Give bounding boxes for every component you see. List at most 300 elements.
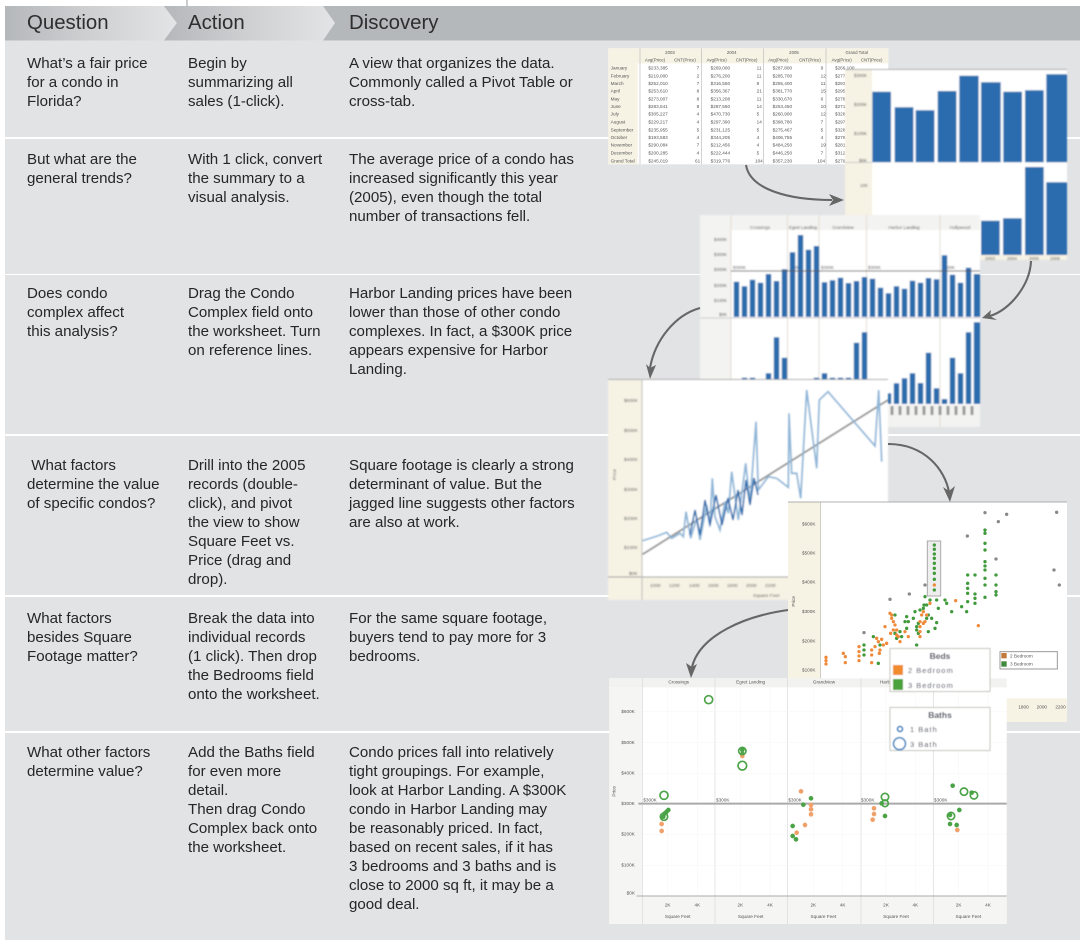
row 5 action: Break the data into	[188, 610, 315, 627]
chart: pivot table: $285,700	[773, 73, 792, 78]
row 5 action: (1 click). Then drop	[188, 648, 317, 665]
chart: square feet vs price line: $200K	[624, 516, 639, 522]
chart: pivot table: $279,000	[835, 135, 855, 140]
legend: baths: 3 Bath	[910, 740, 938, 749]
legend: beds: 2 Bedroom	[908, 666, 954, 675]
row 5 action: onto the worksheet.	[188, 686, 320, 703]
chart: baths scatter by complex: 4K	[694, 902, 701, 907]
chart: pivot table: $312,000	[835, 150, 855, 155]
chart: pivot table: 4	[821, 135, 824, 140]
chart: pivot table: 5	[757, 150, 760, 155]
row 2 action	[188, 151, 322, 206]
chart: pivot table: 11	[757, 73, 762, 78]
row 2 question: general trends?	[27, 170, 132, 187]
chart: pivot table: December	[611, 150, 633, 155]
row 5 action	[188, 610, 320, 703]
legend: baths	[890, 708, 990, 750]
row 6 discovery: Condo prices fall into relatively	[349, 744, 554, 761]
row 4 action: Square Feet vs.	[188, 533, 295, 550]
chart: pivot table: October	[611, 135, 628, 140]
chart: baths scatter by complex: 2K	[810, 902, 817, 907]
chart: pivot table: $278,000	[835, 96, 855, 101]
row 4 action: Price (drag and	[188, 552, 291, 569]
chart: pivot table: 104	[817, 158, 826, 163]
chart: pivot table: 12	[821, 112, 826, 117]
chart: pivot table: June	[611, 104, 621, 109]
chart: baths scatter by complex: Square Feet	[665, 914, 691, 919]
chart: bedrooms scatter: 2000	[1037, 704, 1047, 709]
chart: pivot table: $305,227	[648, 112, 668, 117]
chart: pivot table: $222,444	[711, 150, 730, 155]
chart: pivot table: Avg(Price)	[768, 57, 789, 62]
chart: pivot table: $287,800	[773, 66, 792, 71]
chart: pivot table: $470,730	[711, 112, 730, 117]
chart: bedrooms scatter	[788, 502, 1067, 722]
chart: pivot table: $252,010	[648, 81, 668, 86]
chart: pivot table: $229,217	[648, 120, 668, 125]
row 2 question: But what are the	[27, 151, 137, 168]
chart: pivot table: 4	[697, 150, 700, 155]
chart: condo complex bars: Grandview	[832, 225, 855, 230]
row 1 question: Florida?	[27, 93, 82, 110]
row 5 discovery	[349, 610, 547, 665]
row 2 discovery: The average price of a condo has	[349, 151, 574, 168]
row 5 action: individual records	[188, 629, 305, 646]
arrow: table to bars	[746, 165, 844, 206]
row 6 action: Add the Baths field	[188, 744, 315, 761]
chart: pivot table: November	[611, 143, 633, 148]
chart: square feet vs price line: 1000	[650, 583, 661, 589]
chart: pivot table: 5	[697, 127, 700, 132]
chart: pivot table: Avg(Price)	[707, 57, 727, 62]
row 6 action: Then drag Condo	[188, 801, 305, 818]
row 6 action: Complex back onto	[188, 820, 317, 837]
row 1 discovery: Commonly called a Pivot Table or	[349, 74, 573, 91]
chart: pivot table: $266,100	[835, 66, 855, 71]
chart: baths scatter by complex: 2K	[883, 902, 890, 907]
chart: baths scatter by complex: $300K	[788, 797, 803, 802]
chart: pivot table: 6	[821, 96, 824, 101]
chart: pivot table: 8	[697, 104, 700, 109]
chart: square feet vs price line: $500K	[624, 428, 639, 434]
chart: pivot table: $253,450	[773, 104, 792, 109]
row 4 action: the view to show	[188, 514, 300, 531]
chart: baths scatter by complex: Grandview	[813, 680, 836, 685]
row 3 question	[27, 285, 124, 340]
chart: baths scatter by complex: $100K	[621, 863, 636, 868]
chart: baths scatter by complex: 4K	[840, 902, 846, 907]
chart: baths scatter by complex: 2K	[956, 902, 962, 907]
chart: pivot table: $213,208	[711, 96, 730, 101]
chart: monthly bars: 100	[860, 183, 868, 188]
chart: monthly bars	[845, 69, 1067, 261]
chart: baths scatter by complex: $400K	[621, 771, 636, 776]
chart: pivot table: $255,400	[773, 81, 792, 86]
chart: baths scatter by complex	[609, 678, 1007, 924]
chart: baths scatter by complex: Square Feet	[738, 914, 764, 919]
row 2 discovery: number of transactions fell.	[349, 208, 530, 225]
row 4 question: of specific condos?	[27, 495, 155, 512]
chart: pivot table: $200,285	[648, 150, 668, 155]
row 4 discovery	[348, 457, 575, 531]
chart: condo complex bars: $300K	[942, 265, 955, 270]
chart: pivot table: $279,000	[835, 158, 855, 163]
row 6 action: for even more	[188, 763, 281, 780]
chart: baths scatter by complex: Price	[611, 786, 616, 797]
arrow: scatter to baths chart	[686, 610, 788, 678]
chart: condo complex bars: $300K	[790, 265, 803, 270]
row 1 discovery	[349, 55, 573, 110]
heading: Discovery: Discovery	[349, 12, 439, 34]
chart: bedrooms scatter: Price	[791, 596, 796, 607]
chart: bedrooms scatter: $600K	[802, 522, 816, 527]
row 6 discovery	[349, 744, 566, 913]
chart: condo complex bars: Harbor Landing	[888, 225, 920, 230]
chart: baths scatter by complex: $200K	[621, 832, 636, 837]
row 3 discovery: lower than those of other condo	[349, 304, 560, 321]
chart: pivot table: 5	[757, 127, 760, 132]
chart: pivot table: May	[611, 96, 620, 101]
chart: bedrooms scatter: 2 Bedroom	[1010, 654, 1033, 659]
row 2 action: visual analysis.	[188, 189, 290, 206]
chart: pivot table: 11	[757, 96, 762, 101]
row 3 action: the worksheet. Turn	[188, 323, 321, 340]
row 6 action: detail.	[188, 782, 228, 799]
chart: pivot table: $381,770	[773, 89, 792, 94]
chart: pivot table: $316,550	[711, 81, 730, 86]
chart: pivot table: 5	[757, 112, 760, 117]
legend: beds: 3 Bedroom	[908, 681, 954, 690]
row 6 question: determine value?	[27, 763, 143, 780]
row 6 discovery: be reasonably priced. In fact,	[349, 820, 543, 837]
chart: monthly bars: $300K	[854, 73, 867, 78]
chart: pivot table: $271,000	[835, 104, 855, 109]
legend: beds: Beds	[930, 651, 951, 661]
chart: baths scatter by complex: 2K	[665, 902, 671, 907]
chart: pivot table: March	[611, 81, 624, 86]
chart: pivot table: $297,390	[711, 120, 730, 125]
chart: pivot table: $233,385	[648, 66, 668, 71]
chart: pivot table: $484,250	[773, 143, 792, 148]
row 3 action: Complex field onto	[188, 304, 313, 321]
chart: pivot table: Avg(Price)	[645, 57, 666, 62]
chart: square feet vs price line: $400K	[624, 457, 639, 463]
chart: pivot table: February	[611, 73, 630, 78]
chart: condo complex bars: $300K	[733, 265, 746, 270]
row 1 question: What’s a fair price	[27, 55, 148, 72]
chart: baths scatter by complex: $300K	[716, 797, 730, 802]
row 4 action: click), and pivot	[188, 495, 292, 512]
chart: pivot table: $281,000	[835, 143, 855, 148]
row 2 question	[27, 151, 137, 187]
row 2 action: the summary to a	[188, 170, 305, 187]
chart: monthly bars: 2004	[1007, 256, 1018, 261]
legend: beds	[890, 648, 990, 692]
chart: bedrooms scatter: 1800	[1018, 704, 1029, 709]
row 1 action: summarizing all	[188, 74, 293, 91]
row 6 discovery: look at Harbor Landing. A $300K	[349, 782, 566, 799]
chart: pivot table: April	[611, 89, 620, 94]
chart: baths scatter by complex: $300K	[861, 797, 875, 802]
chart: baths scatter by complex: $0K	[627, 891, 636, 896]
chart: pivot table: Grand Total	[846, 50, 868, 55]
row 5 discovery: bedrooms.	[349, 648, 420, 665]
chart: square feet vs price line: $0K	[629, 571, 638, 577]
chart: baths scatter by complex: 4K	[767, 902, 774, 907]
chart: pivot table: $293,000	[835, 81, 855, 86]
chart: pivot table: $357,230	[773, 158, 792, 163]
chart: pivot table: $193,583	[648, 135, 668, 140]
chart: pivot table: 61	[695, 158, 701, 163]
chart: baths scatter by complex: Square Feet	[883, 914, 910, 919]
chart: pivot table: $295,000	[835, 89, 855, 94]
row 6 discovery: based on recent sales, if it has	[349, 839, 553, 856]
chart: pivot table: $235,955	[648, 127, 668, 132]
row 3 question: Does condo	[27, 285, 108, 302]
row 6 discovery: close to 2000 sq ft, it may be a	[349, 877, 554, 894]
chart: pivot table: $319,776	[711, 158, 730, 163]
chart: condo complex bars: $300K	[868, 265, 881, 270]
chart: baths scatter by complex: $600K	[621, 709, 636, 714]
chart: square feet vs price line: $600K	[624, 398, 639, 404]
row 3 action: Drag the Condo	[188, 285, 295, 302]
chart: pivot table: January	[611, 66, 628, 71]
chart: pivot table: Grand Total	[611, 158, 635, 163]
chart: pivot table: 7	[821, 150, 824, 155]
row 6 question	[27, 744, 150, 780]
chart: baths scatter by complex: 2K	[737, 902, 744, 907]
row 4 question: What factors	[31, 457, 116, 474]
chart: baths scatter by complex: Harbor Landing	[880, 680, 912, 685]
row 1 discovery: A view that organizes the data.	[349, 55, 555, 72]
chart: baths scatter by complex: $300K	[643, 797, 658, 802]
row 6 discovery: 3 bedrooms and 3 baths and is	[349, 858, 556, 875]
row 4 discovery: Square footage is clearly a strong	[349, 457, 574, 474]
chart: pivot table	[608, 48, 888, 164]
chart: square feet vs price line	[608, 379, 888, 600]
chart: pivot table: $277,000	[835, 73, 855, 78]
row 3 discovery: Landing.	[349, 361, 407, 378]
chart: pivot table: 7	[697, 143, 700, 148]
chart: pivot table: 104	[755, 158, 763, 163]
chart: pivot table: 14	[757, 120, 762, 125]
row 1 question: for a condo in	[27, 74, 118, 91]
row 6 discovery: good deal.	[349, 896, 420, 913]
row 6 discovery: tight groupings. For example,	[349, 763, 544, 780]
row 4 discovery: jagged line suggests other factors	[349, 495, 575, 512]
row 1 action: sales (1-click).	[188, 93, 284, 110]
chart: pivot table: $406,755	[773, 135, 792, 140]
chart: square feet vs price line: 1200	[669, 583, 680, 589]
chart: pivot table: Avg(Price)	[832, 57, 852, 62]
chart: baths scatter by complex: Crossings	[668, 680, 690, 685]
chart: pivot table: $290,084	[648, 143, 668, 148]
chart: condo complex bars	[700, 215, 980, 427]
row 4 question	[27, 457, 160, 512]
row 5 discovery: buyers tend to pay more for 3	[349, 629, 546, 646]
row 3 discovery: appears expensive for Harbor	[349, 342, 548, 359]
chart: condo complex bars: $300K	[714, 267, 727, 272]
legend: baths: 1 Bath	[910, 725, 938, 734]
chart: pivot table: 2	[697, 73, 700, 78]
chart: pivot table: $356,367	[711, 89, 730, 94]
row 4 action	[188, 457, 305, 588]
chart: pivot table: 4	[697, 112, 700, 117]
chart: pivot table: $212,456	[711, 143, 730, 148]
chart: pivot table: $245,019	[648, 158, 668, 163]
chart: condo complex bars: Crossings	[750, 225, 771, 230]
chart: baths scatter by complex: 4K	[985, 902, 992, 907]
chart: pivot table: $273,007	[648, 96, 668, 101]
row 2 discovery	[349, 151, 574, 225]
chart: monthly bars: 2005	[1029, 256, 1040, 261]
chart: pivot table: 2004	[727, 50, 737, 55]
chart: pivot table: $219,000	[648, 73, 668, 78]
chart: pivot table: 7	[697, 81, 700, 86]
chart: pivot table: 12	[821, 73, 826, 78]
chart: pivot table: September	[611, 127, 634, 132]
chart: pivot table: 2003	[665, 50, 675, 55]
chart: bedrooms scatter: $300K	[802, 609, 816, 614]
row 4 action: Drill into the 2005	[188, 457, 305, 474]
chart: square feet vs price line: Square Feet	[753, 593, 780, 599]
chart: pivot table: 7	[821, 120, 824, 125]
chart: pivot table: 11	[821, 81, 826, 86]
chart: pivot table: 9	[821, 66, 824, 71]
chart: bedrooms scatter: 3 Bedroom	[1010, 662, 1033, 667]
chart: condo complex bars: $200K	[714, 283, 727, 288]
chart: condo complex bars: Egret Landing	[789, 225, 818, 230]
chart: square feet vs price line: 1400	[689, 583, 700, 589]
row 4 action: records (double-	[188, 476, 298, 493]
row 6 discovery: condo in Harbor Landing may	[349, 801, 547, 818]
chart: monthly bars: 2006	[1050, 256, 1061, 261]
chart: pivot table: 4	[697, 120, 700, 125]
row 2 discovery: (2005), even though the total	[349, 189, 542, 206]
chart: pivot table: $269,000	[711, 66, 730, 71]
chart: pivot table: 10	[821, 104, 826, 109]
heading: Action: Action	[188, 12, 245, 34]
row 6 action	[188, 744, 317, 856]
arrow: bars to complex chart	[982, 261, 1031, 320]
row 4 discovery: determinant of value. But the	[349, 476, 542, 493]
chart: pivot table: 8	[697, 89, 700, 94]
legend: baths: Baths	[928, 710, 952, 720]
chart: pivot table: $275,467	[773, 127, 792, 132]
row 5 question: What factors	[27, 610, 112, 627]
chart: pivot table: $398,780	[773, 120, 792, 125]
chart: bedrooms scatter: $200K	[802, 638, 816, 643]
row 5 question: Footage matter?	[27, 648, 138, 665]
chart: baths scatter by complex: Egret Landing	[736, 680, 766, 685]
chart: square feet vs price line: 2000	[746, 583, 757, 589]
row 5 question: besides Square	[27, 629, 132, 646]
chart: pivot table: 4	[757, 135, 760, 140]
row 3 discovery: complexes. In fact, a $300K price	[349, 323, 572, 340]
chart: pivot table: $231,125	[711, 127, 730, 132]
chart: pivot table: July	[611, 112, 620, 117]
chart: pivot table: 2005	[789, 50, 799, 55]
chart: pivot table: $287,550	[711, 104, 730, 109]
chart: pivot table: CNT(Price)	[674, 57, 696, 62]
row 3 question: this analysis?	[27, 323, 118, 340]
row 6 question: What other factors	[27, 744, 150, 761]
row 3 question: complex affect	[27, 304, 124, 321]
row 3 discovery	[349, 285, 572, 378]
chart: pivot table: CNT(Price)	[861, 57, 883, 62]
chart: pivot table: 7	[697, 66, 700, 71]
chart: pivot table: $276,200	[711, 73, 730, 78]
chart: monthly bars: $100K	[854, 131, 867, 136]
chart: baths scatter by complex: 4K	[912, 902, 919, 907]
chart: bedrooms scatter: $100K	[802, 667, 816, 672]
chart: condo complex bars: $300K	[821, 265, 834, 270]
chart: condo complex bars: $100K	[714, 298, 727, 303]
heading: Question: Question	[27, 12, 109, 34]
chart: pivot table: 4	[757, 143, 760, 148]
chart: baths scatter by complex: $300K	[934, 797, 948, 802]
chart: pivot table: $328,000	[835, 127, 855, 132]
chart: pivot table: $344,205	[711, 135, 730, 140]
row 3 action: on reference lines.	[188, 342, 312, 359]
chart: square feet vs price line: Price	[612, 469, 618, 480]
background rows	[5, 40, 1080, 137]
chart: bedrooms scatter: $400K	[802, 580, 816, 585]
row 2 action: With 1 click, convert	[188, 151, 322, 168]
row 1 action	[188, 55, 293, 110]
chart: baths scatter by complex: $300K	[621, 801, 636, 806]
chart: pivot table: $260,900	[773, 112, 792, 117]
chart: pivot table: CNT(Price)	[799, 57, 821, 62]
chart: condo complex bars: $400K	[714, 237, 727, 242]
chart: monthly bars: $0K	[859, 158, 867, 163]
chart: baths scatter by complex: Square Feet	[811, 914, 837, 919]
chart: pivot table: 21	[757, 89, 762, 94]
chart: pivot table: 5	[821, 127, 824, 132]
chart: pivot table: August	[611, 120, 626, 125]
chart: pivot table: 9	[757, 81, 760, 86]
chart: square feet vs price line: $100K	[624, 545, 639, 551]
row 3 action	[188, 285, 321, 359]
chart: pivot table: 14	[757, 104, 762, 109]
chart: monthly bars: $200K	[854, 102, 867, 107]
row 5 action: the Bedrooms field	[188, 667, 314, 684]
row 5 discovery: For the same square footage,	[349, 610, 547, 627]
chart: square feet vs price line: $300K	[624, 487, 639, 493]
chart: square feet vs price line: 1800	[727, 583, 738, 589]
row 2 discovery: increased significantly this year	[349, 170, 558, 187]
chart: pivot table: $446,250	[773, 150, 792, 155]
row 4 action: drop).	[188, 571, 227, 588]
chart: pivot table: 4	[697, 135, 700, 140]
chart: pivot table: $297,000	[835, 120, 855, 125]
chart: bedrooms scatter: 2200	[1055, 704, 1066, 709]
row 1 action: Begin by	[188, 55, 247, 72]
row 5 question	[27, 610, 138, 665]
row 4 discovery: are also at work.	[349, 514, 460, 531]
chart: pivot table: 11	[757, 66, 762, 71]
row 4 question: determine the value	[27, 476, 160, 493]
chart: square feet vs price line: 2200	[765, 583, 776, 589]
chart: pivot table: $330,670	[773, 96, 792, 101]
row 6 action: the worksheet.	[188, 839, 286, 856]
arrow: line chart to scatter	[888, 444, 955, 502]
row 3 discovery: Harbor Landing prices have been	[349, 285, 572, 302]
row 1 discovery: cross-tab.	[349, 93, 415, 110]
chart: pivot table: $328,000	[835, 112, 855, 117]
header band	[5, 0, 1080, 40]
chart: pivot table: $283,541	[648, 104, 668, 109]
